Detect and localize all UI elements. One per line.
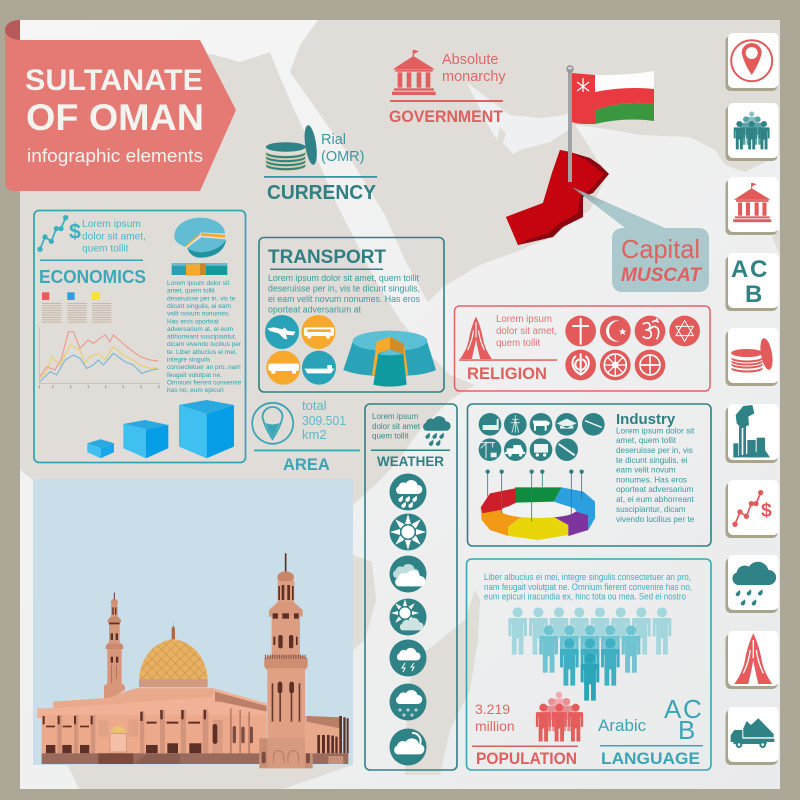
transport icons <box>265 315 336 385</box>
panel: industry: te dicunt singulis, ei <box>616 456 688 465</box>
panel: industry: eam velit novum <box>616 466 676 474</box>
panel: weather: quem tollit <box>372 432 409 440</box>
icon card: government <box>726 177 778 235</box>
icon card: economics: $ <box>761 501 772 522</box>
economics text: abhorreant suscipiantur, <box>167 334 237 340</box>
economics text: te. Liber albucius ei mei, <box>167 349 237 356</box>
panel: weather: dolor sit amet <box>372 422 421 431</box>
panel: economics: dolor sit amet, <box>82 232 146 242</box>
capital callout: Capital <box>621 234 700 264</box>
government block <box>389 50 506 126</box>
panel: industry: Lorem ipsum dolor sit <box>616 426 695 436</box>
icon: government building <box>392 50 436 95</box>
economics text: adversarium at, ei eum <box>167 326 233 333</box>
religion symbols <box>565 316 700 380</box>
icon: red people group <box>536 692 583 742</box>
capital callout <box>572 187 709 292</box>
panel: economics <box>34 210 246 462</box>
icon: sun <box>390 514 426 550</box>
area block: total <box>302 398 327 413</box>
economics text: has no, eum epicuri <box>167 387 224 394</box>
economics text: consectetuer an pro, nam <box>167 364 241 371</box>
panel: population and language: nam feugait volutpat ne. Omnium fierent convenire has no, <box>484 582 692 592</box>
cylinder chart <box>343 331 436 387</box>
panel: industry: at, ei eum abhorreant <box>616 495 695 504</box>
icon: sun and cloud <box>390 598 426 636</box>
panel: industry: amet, quem tollit <box>616 436 677 445</box>
icon card: weather <box>726 555 778 613</box>
icon: storm <box>390 640 426 676</box>
economics text: feugait volutpat ne. <box>167 372 222 379</box>
panel: industry: nonumes. Has eros <box>616 476 687 484</box>
icon card: language <box>726 253 778 311</box>
line chart with legend <box>39 292 160 388</box>
ring chart <box>481 469 595 540</box>
icon: economics chart <box>37 215 81 252</box>
panel: religion: Lorem ipsum <box>496 314 552 325</box>
icon card: religion <box>726 631 778 689</box>
economics text: deseruisse per in, vis te <box>167 295 236 302</box>
panel: industry <box>468 404 711 546</box>
area block <box>252 398 360 474</box>
capital callout: MUSCAT <box>621 265 702 286</box>
icon: location pin <box>252 403 293 444</box>
icon card: language: A <box>731 256 748 283</box>
economics text: Lorem ipsum dolor sit <box>167 280 229 287</box>
icon: ABC letters: C <box>683 694 702 724</box>
area block: km2 <box>302 427 327 442</box>
panel: weather: Lorem ipsum <box>372 412 419 421</box>
panel: transport: TRANSPORT <box>268 247 386 268</box>
panel: population and language: Liber albucius ei mei, integre singulis consectetuer an pro, <box>484 572 691 582</box>
panel: religion: dolor sit amet, <box>496 326 557 337</box>
panel: industry: deseruisse per in, vis <box>616 446 693 455</box>
panel: industry: oporteat adversarium <box>616 485 694 494</box>
panel: industry: Industry <box>616 411 676 428</box>
economics text: Omnium fierent convenire <box>167 379 242 386</box>
title banner: infographic elements <box>27 146 203 166</box>
illustration: grand mosque <box>33 479 353 768</box>
panel: population and language: eum epicuri iracundia ex, hinc tota ou mea. Sed ei nostro <box>484 592 686 602</box>
icon: snow <box>390 684 426 720</box>
icon: ABC letters: A <box>664 694 682 724</box>
icon card: language: C <box>750 256 767 283</box>
panel: weather: WEATHER <box>377 453 444 469</box>
icon: cloudy <box>390 556 426 592</box>
title banner <box>5 20 236 191</box>
oman map <box>506 150 609 245</box>
icon card: industry <box>726 404 778 463</box>
title banner: SULTANATE <box>25 64 203 97</box>
bar chart strip <box>172 263 227 276</box>
area block: AREA <box>283 456 330 474</box>
panel: industry: suscipiantur, dicam <box>616 505 686 514</box>
panel: population and language <box>466 559 711 770</box>
icon card: people <box>726 103 778 161</box>
panel: economics: ECONOMICS <box>39 267 146 287</box>
economics text: Has eros oporteat <box>167 318 219 325</box>
economics text: integre singulis <box>167 356 211 364</box>
panel: industry: vivendo lucilius per te <box>616 515 695 524</box>
panel: population and language: POPULATION <box>476 750 577 768</box>
icon card: coins <box>726 328 778 386</box>
panel: transport: deseruisse per in, vis te dicunt singulis, <box>268 284 420 294</box>
flag <box>567 66 654 182</box>
currency block: Rial <box>321 132 346 148</box>
panel: transport <box>259 238 444 392</box>
industry icons <box>479 413 605 461</box>
area block: 309.501 <box>302 413 346 428</box>
government block: Absolute <box>442 52 498 68</box>
panel: transport: ei eam velit novum nonumes. Has eros <box>268 294 420 304</box>
pie chart <box>174 218 226 258</box>
icon: praying hands <box>460 316 492 359</box>
icon card: truck <box>726 707 778 765</box>
people pictogram <box>508 607 671 701</box>
icon: night cloud <box>390 728 426 766</box>
panel: weather <box>365 404 457 770</box>
panel: religion <box>454 306 710 391</box>
panel: population and language: LANGUAGE <box>601 749 700 768</box>
panel: economics: quem tollit <box>82 244 129 254</box>
icon: economics chart: $ <box>69 220 81 244</box>
title banner: OF OMAN <box>26 97 204 138</box>
panel: transport: Lorem ipsum dolor sit amet, quem tollit <box>268 273 419 283</box>
panel: religion: RELIGION <box>467 365 547 383</box>
panel: population and language: 3.219 <box>475 701 510 717</box>
cubes chart <box>87 400 234 458</box>
icon: ABC letters <box>664 694 702 745</box>
economics text: dicam vivendo lucilius per <box>167 341 242 348</box>
icon: ABC letters: B <box>678 715 695 745</box>
icon card: language: B <box>745 281 762 308</box>
government block: GOVERNMENT <box>389 108 503 126</box>
economics text: amet, quem tollit <box>167 288 215 295</box>
panel: population and language: million <box>475 718 515 734</box>
icon: coins <box>266 124 319 171</box>
panel: transport: oporteat adversarium at <box>268 304 361 314</box>
panel: economics: Lorem ipsum <box>82 219 141 230</box>
economics text: velit novum nonumes. <box>167 311 230 318</box>
icon: rain cloud <box>423 416 451 446</box>
icon: rain <box>390 474 426 510</box>
currency block: (OMR) <box>321 149 364 165</box>
panel: population and language: Arabic <box>598 716 647 735</box>
currency block <box>264 124 377 204</box>
economics text: dicunt singulis, ei eam <box>167 303 231 310</box>
economics text <box>167 280 242 394</box>
government block: monarchy <box>442 69 506 85</box>
currency block: CURRENCY <box>267 182 377 204</box>
panel: religion: quem tollit <box>496 338 540 349</box>
icon card: economics <box>726 480 778 538</box>
icon card: location <box>726 33 778 91</box>
